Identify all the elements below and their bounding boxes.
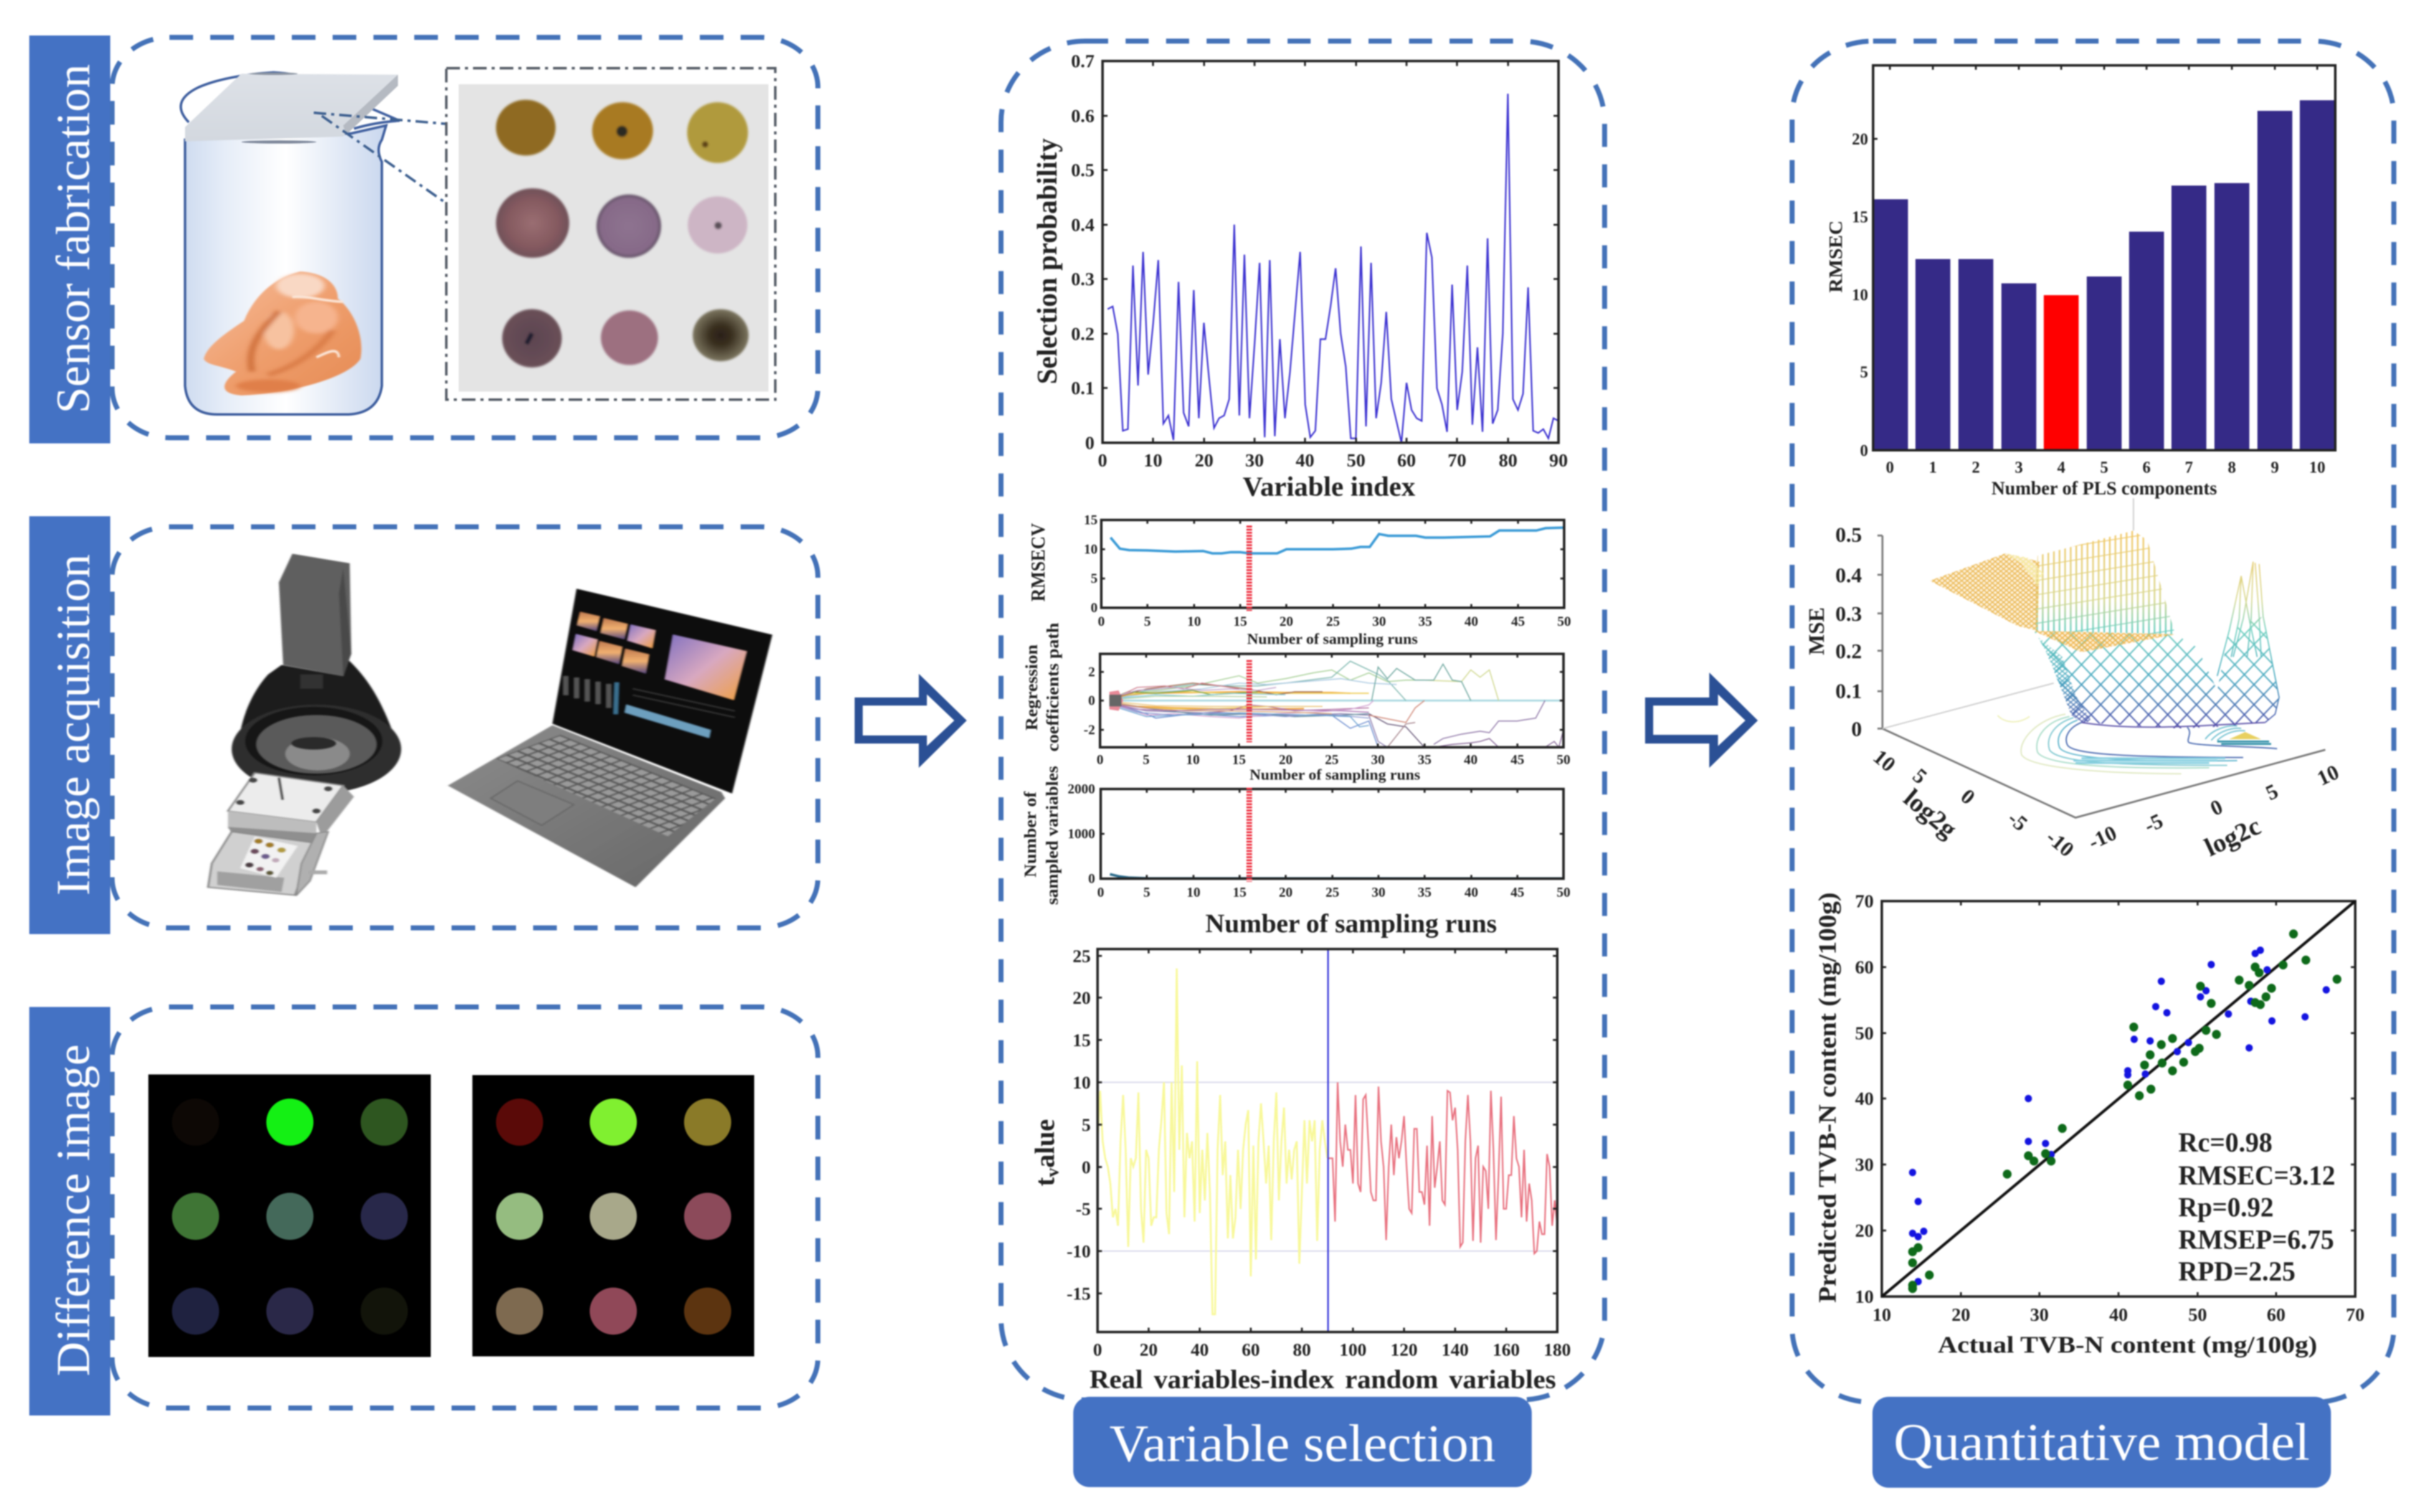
chart: RMSEC bar chart: 3 [2014, 458, 2023, 476]
icon: laptop [448, 588, 772, 887]
chart: t-value real vs random variables: -5 [1076, 1199, 1091, 1219]
chart: number of sampled variables: 0 [1088, 871, 1095, 886]
model statistics: RPD=2.25 [2178, 1256, 2295, 1287]
callout box: sensor array photograph [446, 68, 776, 400]
chart: RMSECV: Number of sampling runs [1247, 631, 1418, 648]
chart: RMSECV: 20 [1279, 613, 1293, 629]
highlighted bar: 4 components [2044, 295, 2079, 450]
chart: regression coefficients path: 10 [1186, 752, 1200, 767]
chart: RMSEC bar chart: 5 [1860, 363, 1868, 381]
chart: t-value real vs random variables: 0 [1093, 1340, 1102, 1360]
chart: predicted vs actual scatter: Predicted TVB-N content (mg/100g) [1813, 892, 1841, 1303]
chart: selection probability line chart: 0.3 [1071, 269, 1094, 290]
1:1 line [1882, 901, 2355, 1297]
chart: MSE 3D mesh surface: -10 [2041, 826, 2078, 862]
chart: RMSECV: 10 [1187, 613, 1201, 629]
chart: RMSECV: 35 [1418, 613, 1432, 629]
chart: MSE 3D mesh surface: 10 [1869, 745, 1900, 777]
chart: selection probability line chart: 0.4 [1071, 215, 1094, 235]
chart: t-value real vs random variables: Real variables-index random variables [1089, 1366, 1556, 1394]
heading: variable selection: Variable selection [1109, 1414, 1496, 1473]
chart: t-value real vs random variables: 20 [1073, 988, 1091, 1008]
model statistics: RMSEC=3.12 [2178, 1160, 2335, 1191]
chart: RMSECV: 15 [1084, 512, 1098, 527]
chart: selection probability line chart: 0.5 [1071, 160, 1094, 181]
panel: sensor fabrication [29, 35, 818, 443]
chart: MSE 3D mesh surface: 0 [1956, 785, 1979, 810]
chart: regression coefficients path: 0 [1096, 752, 1104, 767]
chart: number of sampled variables: 0 [1098, 884, 1104, 900]
heading: variable selection [1073, 1397, 1532, 1487]
model statistics: Rp=0.92 [2178, 1192, 2274, 1222]
chart: RMSEC bar chart: 2 [1972, 458, 1980, 476]
chart: MSE 3D mesh surface: log2g [1898, 784, 1962, 844]
chart: regression coefficients path: -2 [1084, 722, 1095, 737]
chart: regression coefficients path: 5 [1142, 752, 1150, 767]
chart: MSE 3D mesh surface: 0.3 [1835, 603, 1862, 626]
chart: t-value real vs random variables: 100 [1339, 1340, 1367, 1360]
chart: number of sampled variables: 1000 [1068, 826, 1095, 841]
chart: RMSEC bar chart: 7 [2185, 458, 2193, 476]
chart: number of sampled variables: 20 [1279, 884, 1293, 900]
heading: sensor fabrication [29, 35, 110, 443]
chart: predicted vs actual scatter: 60 [2267, 1305, 2285, 1325]
chart: t-value real vs random variables: t [1030, 1177, 1060, 1186]
prediction points: blue [1909, 947, 2330, 1285]
chart: selection probability line chart: Variable index [1243, 471, 1415, 502]
chart: MSE 3D mesh surface: 0 [2207, 795, 2226, 821]
laptop screen content [566, 612, 747, 738]
chart: MSE 3D mesh surface: -10 [2085, 821, 2120, 854]
chart: number of sampled variables: Number of [1021, 791, 1040, 877]
chart: RMSECV: 50 [1557, 613, 1571, 629]
chart: t-value real vs random variables: v [1042, 1168, 1063, 1177]
chart: t-value real vs random variables: 180 [1544, 1340, 1571, 1360]
chart: predicted vs actual scatter: 70 [1855, 891, 1874, 912]
chart: RMSECV: 0 [1098, 613, 1105, 629]
chart: selection probability line chart: 0.1 [1071, 378, 1094, 399]
icon: beaker with chicken and sensor plate [181, 72, 446, 415]
chart: RMSECV [1027, 512, 1571, 648]
heading: difference image [29, 1007, 110, 1415]
chart: number of sampled variables: 25 [1326, 884, 1339, 900]
chart: t-value real vs random variables: 120 [1390, 1340, 1418, 1360]
chart: t-value real vs random variables: 40 [1191, 1340, 1208, 1360]
chart: t-value real vs random variables: 5 [1081, 1115, 1091, 1135]
arrow: left to middle [855, 674, 967, 768]
chart: RMSECV: RMSECV [1027, 523, 1049, 602]
sensor plate [185, 72, 398, 144]
chart: RMSECV: 5 [1144, 613, 1151, 629]
chart: RMSEC bar chart [1824, 65, 2335, 499]
chart: regression coefficients path: Regression [1022, 645, 1041, 730]
model statistics [2178, 1127, 2335, 1287]
chart: RMSECV: 10 [1084, 541, 1098, 557]
chart: MSE 3D mesh surface: -5 [2003, 807, 2031, 836]
chart: selection probability line chart: 60 [1397, 450, 1416, 471]
chart: selection probability line chart: 0.2 [1071, 324, 1094, 344]
chart: regression coefficients path [1022, 623, 1570, 783]
chart: predicted vs actual scatter: 20 [1855, 1221, 1874, 1241]
chart: MSE 3D mesh surface: 5 [2262, 780, 2282, 805]
chart: predicted vs actual scatter: 10 [1872, 1305, 1891, 1325]
chart: MSE 3D mesh surface: 0 [1851, 718, 1862, 741]
chart: MSE 3D mesh surface: 0.5 [1835, 524, 1862, 547]
chart: RMSEC bar chart: 0 [1860, 442, 1868, 460]
chart: selection probability line chart: 0.6 [1071, 106, 1094, 126]
callout lines [314, 113, 446, 203]
chart: predicted vs actual scatter: 30 [1855, 1155, 1874, 1175]
chart: selection probability line chart: 40 [1296, 450, 1314, 471]
chart: RMSEC bar chart: 6 [2143, 458, 2150, 476]
chart: regression coefficients path: Number of sampling runs [1250, 767, 1420, 783]
chart: RMSEC bar chart: Number of PLS components [1991, 477, 2217, 499]
chart: number of sampled variables: Number of sampling runs [1205, 910, 1497, 938]
chart: number of sampled variables: 35 [1418, 884, 1431, 900]
chart: RMSECV: 0 [1091, 600, 1098, 615]
chart: MSE 3D mesh surface: 0.2 [1835, 640, 1862, 663]
chart: number of sampled variables: 10 [1187, 884, 1200, 900]
chart: RMSECV: 45 [1511, 613, 1525, 629]
chart: RMSECV: 40 [1464, 613, 1478, 629]
chart: RMSEC bar chart: 20 [1852, 130, 1868, 148]
chart: MSE 3D mesh surface: 0.4 [1835, 564, 1862, 587]
chart: RMSECV: 25 [1326, 613, 1340, 629]
chart: MSE 3D mesh surface: 5 [1908, 764, 1931, 789]
model statistics: RMSEP=6.75 [2178, 1224, 2334, 1255]
chart: selection probability line chart: 70 [1448, 450, 1466, 471]
chart: selection probability line chart: 0 [1085, 433, 1094, 453]
chart: t-value real vs random variables: 140 [1441, 1340, 1469, 1360]
arrow: middle to right [1645, 673, 1758, 768]
chart: RMSECV: 15 [1233, 613, 1247, 629]
chart: regression coefficients path: 2 [1088, 664, 1095, 679]
chart: predicted vs actual scatter [1813, 891, 2365, 1358]
difference image: right [472, 1075, 754, 1356]
chart: number of sampled variables: 2000 [1068, 781, 1095, 796]
heading: image acquisition: Image acquisition [47, 554, 100, 895]
chart: t-value real vs random variables: 15 [1073, 1031, 1091, 1051]
chart: number of sampled variables: 45 [1511, 884, 1524, 900]
chart: predicted vs actual scatter: 70 [2346, 1305, 2365, 1325]
chart: t-value real vs random variables: -15 [1066, 1284, 1091, 1304]
panel: variable selection [1001, 41, 1605, 1487]
chart: selection probability line chart: 80 [1499, 450, 1517, 471]
chart: regression coefficients path: 30 [1371, 752, 1385, 767]
chart: MSE 3D mesh surface: MSE [1804, 607, 1829, 655]
chart: MSE 3D mesh surface: 0.1 [1835, 680, 1862, 703]
chart: selection probability line chart [1031, 51, 1568, 502]
chart: RMSECV: 5 [1091, 570, 1098, 586]
chart: t-value real vs random variables: alue [1030, 1119, 1060, 1168]
chart: regression coefficients path: coefficients path [1043, 623, 1062, 752]
chart: RMSEC bar chart: 10 [2309, 458, 2325, 476]
chart: RMSEC bar chart: RMSEC [1824, 220, 1846, 293]
chart: regression coefficients path: 25 [1325, 752, 1339, 767]
chart: selection probability line chart: 20 [1195, 450, 1213, 471]
chart: RMSEC bar chart: 0 [1886, 458, 1894, 476]
panel: quantitative model [1792, 41, 2394, 1488]
chart: t-value real vs random variables: 60 [1242, 1340, 1260, 1360]
chart: RMSEC bar chart: 4 [2057, 458, 2066, 476]
chart: predicted vs actual scatter: 50 [2188, 1305, 2207, 1325]
chart: regression coefficients path: 35 [1418, 752, 1431, 767]
chart: RMSEC bar chart: 8 [2228, 458, 2236, 476]
chart: RMSEC bar chart: 9 [2271, 458, 2279, 476]
chart: RMSEC bar chart: 15 [1852, 208, 1868, 226]
chart: RMSEC bar chart: 10 [1852, 286, 1868, 304]
mesh surface [1930, 531, 2279, 729]
calibration points: green [1908, 929, 2342, 1293]
model statistics: Rc=0.98 [2178, 1127, 2272, 1158]
chart: predicted vs actual scatter: 40 [2109, 1305, 2128, 1325]
chart: number of sampled variables: 50 [1557, 884, 1570, 900]
chart: MSE 3D mesh surface [1804, 498, 2343, 862]
chart: t-value real vs random variables: 160 [1492, 1340, 1520, 1360]
chart: regression coefficients path: 50 [1557, 752, 1570, 767]
heading: difference image: Difference image [47, 1044, 100, 1376]
chart: t-value real vs random variables: -10 [1066, 1242, 1091, 1262]
chart: t-value real vs random variables: 20 [1140, 1340, 1157, 1360]
chart: t-value real vs random variables: 80 [1293, 1340, 1311, 1360]
chart: number of sampled variables [1021, 766, 1570, 938]
chart: predicted vs actual scatter: 10 [1855, 1287, 1874, 1307]
heading: sensor fabrication: Sensor fabrication [47, 64, 100, 413]
chart: RMSEC bar chart: 1 [1929, 458, 1937, 476]
chart: MSE 3D mesh surface: 10 [2313, 761, 2343, 790]
chart: selection probability line chart: 90 [1549, 450, 1568, 471]
chart: number of sampled variables: 30 [1372, 884, 1385, 900]
chart: predicted vs actual scatter: 50 [1855, 1023, 1874, 1044]
panel: image acquisition [29, 516, 818, 934]
chart: regression coefficients path: 45 [1511, 752, 1524, 767]
chart: t-value real vs random variables: 10 [1073, 1073, 1091, 1093]
heading: quantitative model: Quantitative model [1894, 1413, 2310, 1472]
chart: RMSECV: 30 [1372, 613, 1386, 629]
chart: RMSEC bar chart: 5 [2100, 458, 2108, 476]
chart: selection probability line chart: 10 [1144, 450, 1162, 471]
chart: selection probability line chart: 30 [1245, 450, 1264, 471]
heading: image acquisition [29, 516, 110, 934]
chicken meat [204, 272, 361, 395]
panel: difference image [29, 1007, 818, 1415]
chart: predicted vs actual scatter: 40 [1855, 1089, 1874, 1109]
sensor array spots [496, 100, 749, 367]
chart: predicted vs actual scatter: 20 [1952, 1305, 1970, 1325]
difference image: left [148, 1074, 431, 1357]
chart: MSE 3D mesh surface: -5 [2141, 810, 2166, 838]
chart: t-value real vs random variables: 0 [1081, 1158, 1091, 1178]
chart: number of sampled variables: 15 [1233, 884, 1246, 900]
chart: predicted vs actual scatter: Actual TVB-N content (mg/100g) [1938, 1332, 2317, 1358]
chart: number of sampled variables: 40 [1464, 884, 1478, 900]
chart: regression coefficients path: 15 [1232, 752, 1246, 767]
contour lines [1998, 714, 2277, 773]
heading: quantitative model [1872, 1397, 2331, 1488]
chart: selection probability line chart: Selection probability [1031, 138, 1063, 384]
chart: selection probability line chart: 0 [1098, 450, 1108, 471]
icon: imaging device [208, 554, 401, 896]
chart: t-value real vs random variables: 25 [1073, 947, 1091, 966]
chart: regression coefficients path: 20 [1279, 752, 1293, 767]
chart: predicted vs actual scatter: 30 [2030, 1305, 2049, 1325]
chart: regression coefficients path: 40 [1464, 752, 1478, 767]
chart: selection probability line chart: 0.7 [1071, 51, 1094, 72]
chart: selection probability line chart: 50 [1347, 450, 1365, 471]
chart: predicted vs actual scatter: 60 [1855, 957, 1874, 978]
chart: MSE 3D mesh surface: log2c [2201, 812, 2266, 862]
chart: number of sampled variables: 5 [1144, 884, 1150, 900]
chart: number of sampled variables: sampled variables [1043, 766, 1061, 905]
chart: t-value real vs random variables [1030, 947, 1571, 1394]
chart: regression coefficients path: 0 [1088, 692, 1095, 708]
